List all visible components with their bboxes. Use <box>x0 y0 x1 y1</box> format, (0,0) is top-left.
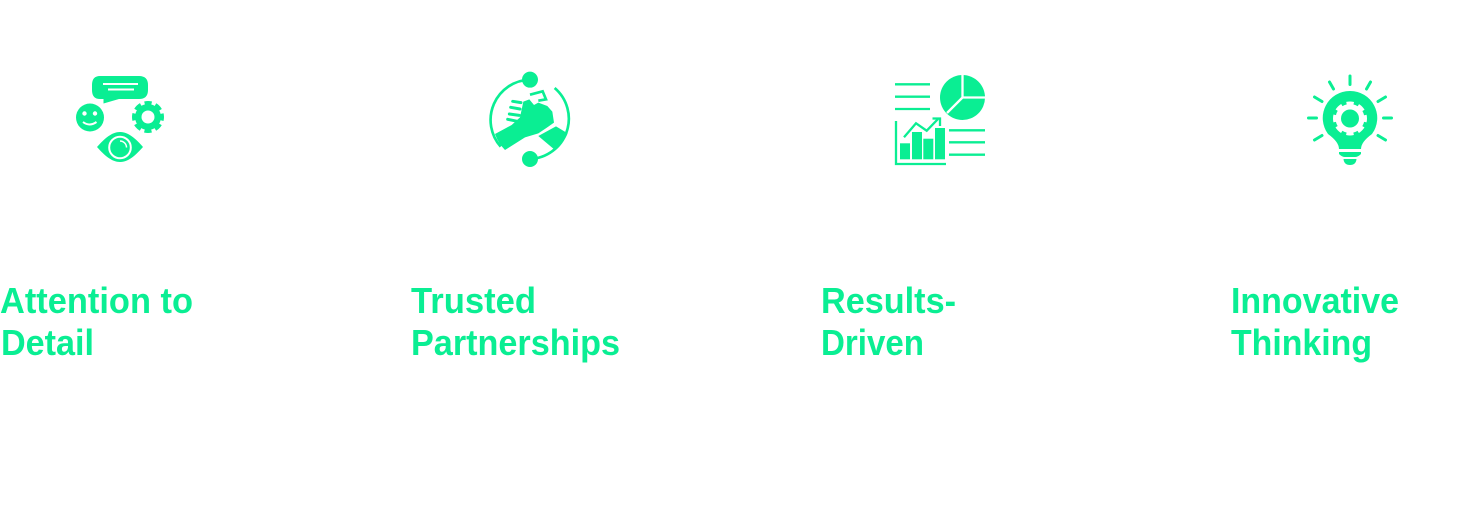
heading: Attention to Detail: Attention to <box>0 280 193 321</box>
icon: innovative thinking <box>1308 76 1392 165</box>
heading: Innovative Thinking: Thinking <box>1231 322 1372 363</box>
heading: Innovative Thinking <box>1231 280 1399 363</box>
heading: Trusted Partnerships: Trusted <box>411 280 536 321</box>
heading: Trusted Partnerships <box>411 280 620 363</box>
heading: Attention to Detail: Detail <box>1 322 94 363</box>
heading: Results-Driven <box>821 280 956 363</box>
icon: attention to detail <box>76 76 162 162</box>
icon: results-driven <box>895 74 987 164</box>
heading: Trusted Partnerships: Partnerships <box>411 322 620 363</box>
heading: Attention to Detail <box>0 280 193 363</box>
heading: Results-Driven: Driven <box>821 322 924 363</box>
heading: Results-Driven: Results- <box>821 280 956 321</box>
icon: trusted partnerships <box>491 72 569 167</box>
heading: Innovative Thinking: Innovative <box>1231 280 1399 321</box>
